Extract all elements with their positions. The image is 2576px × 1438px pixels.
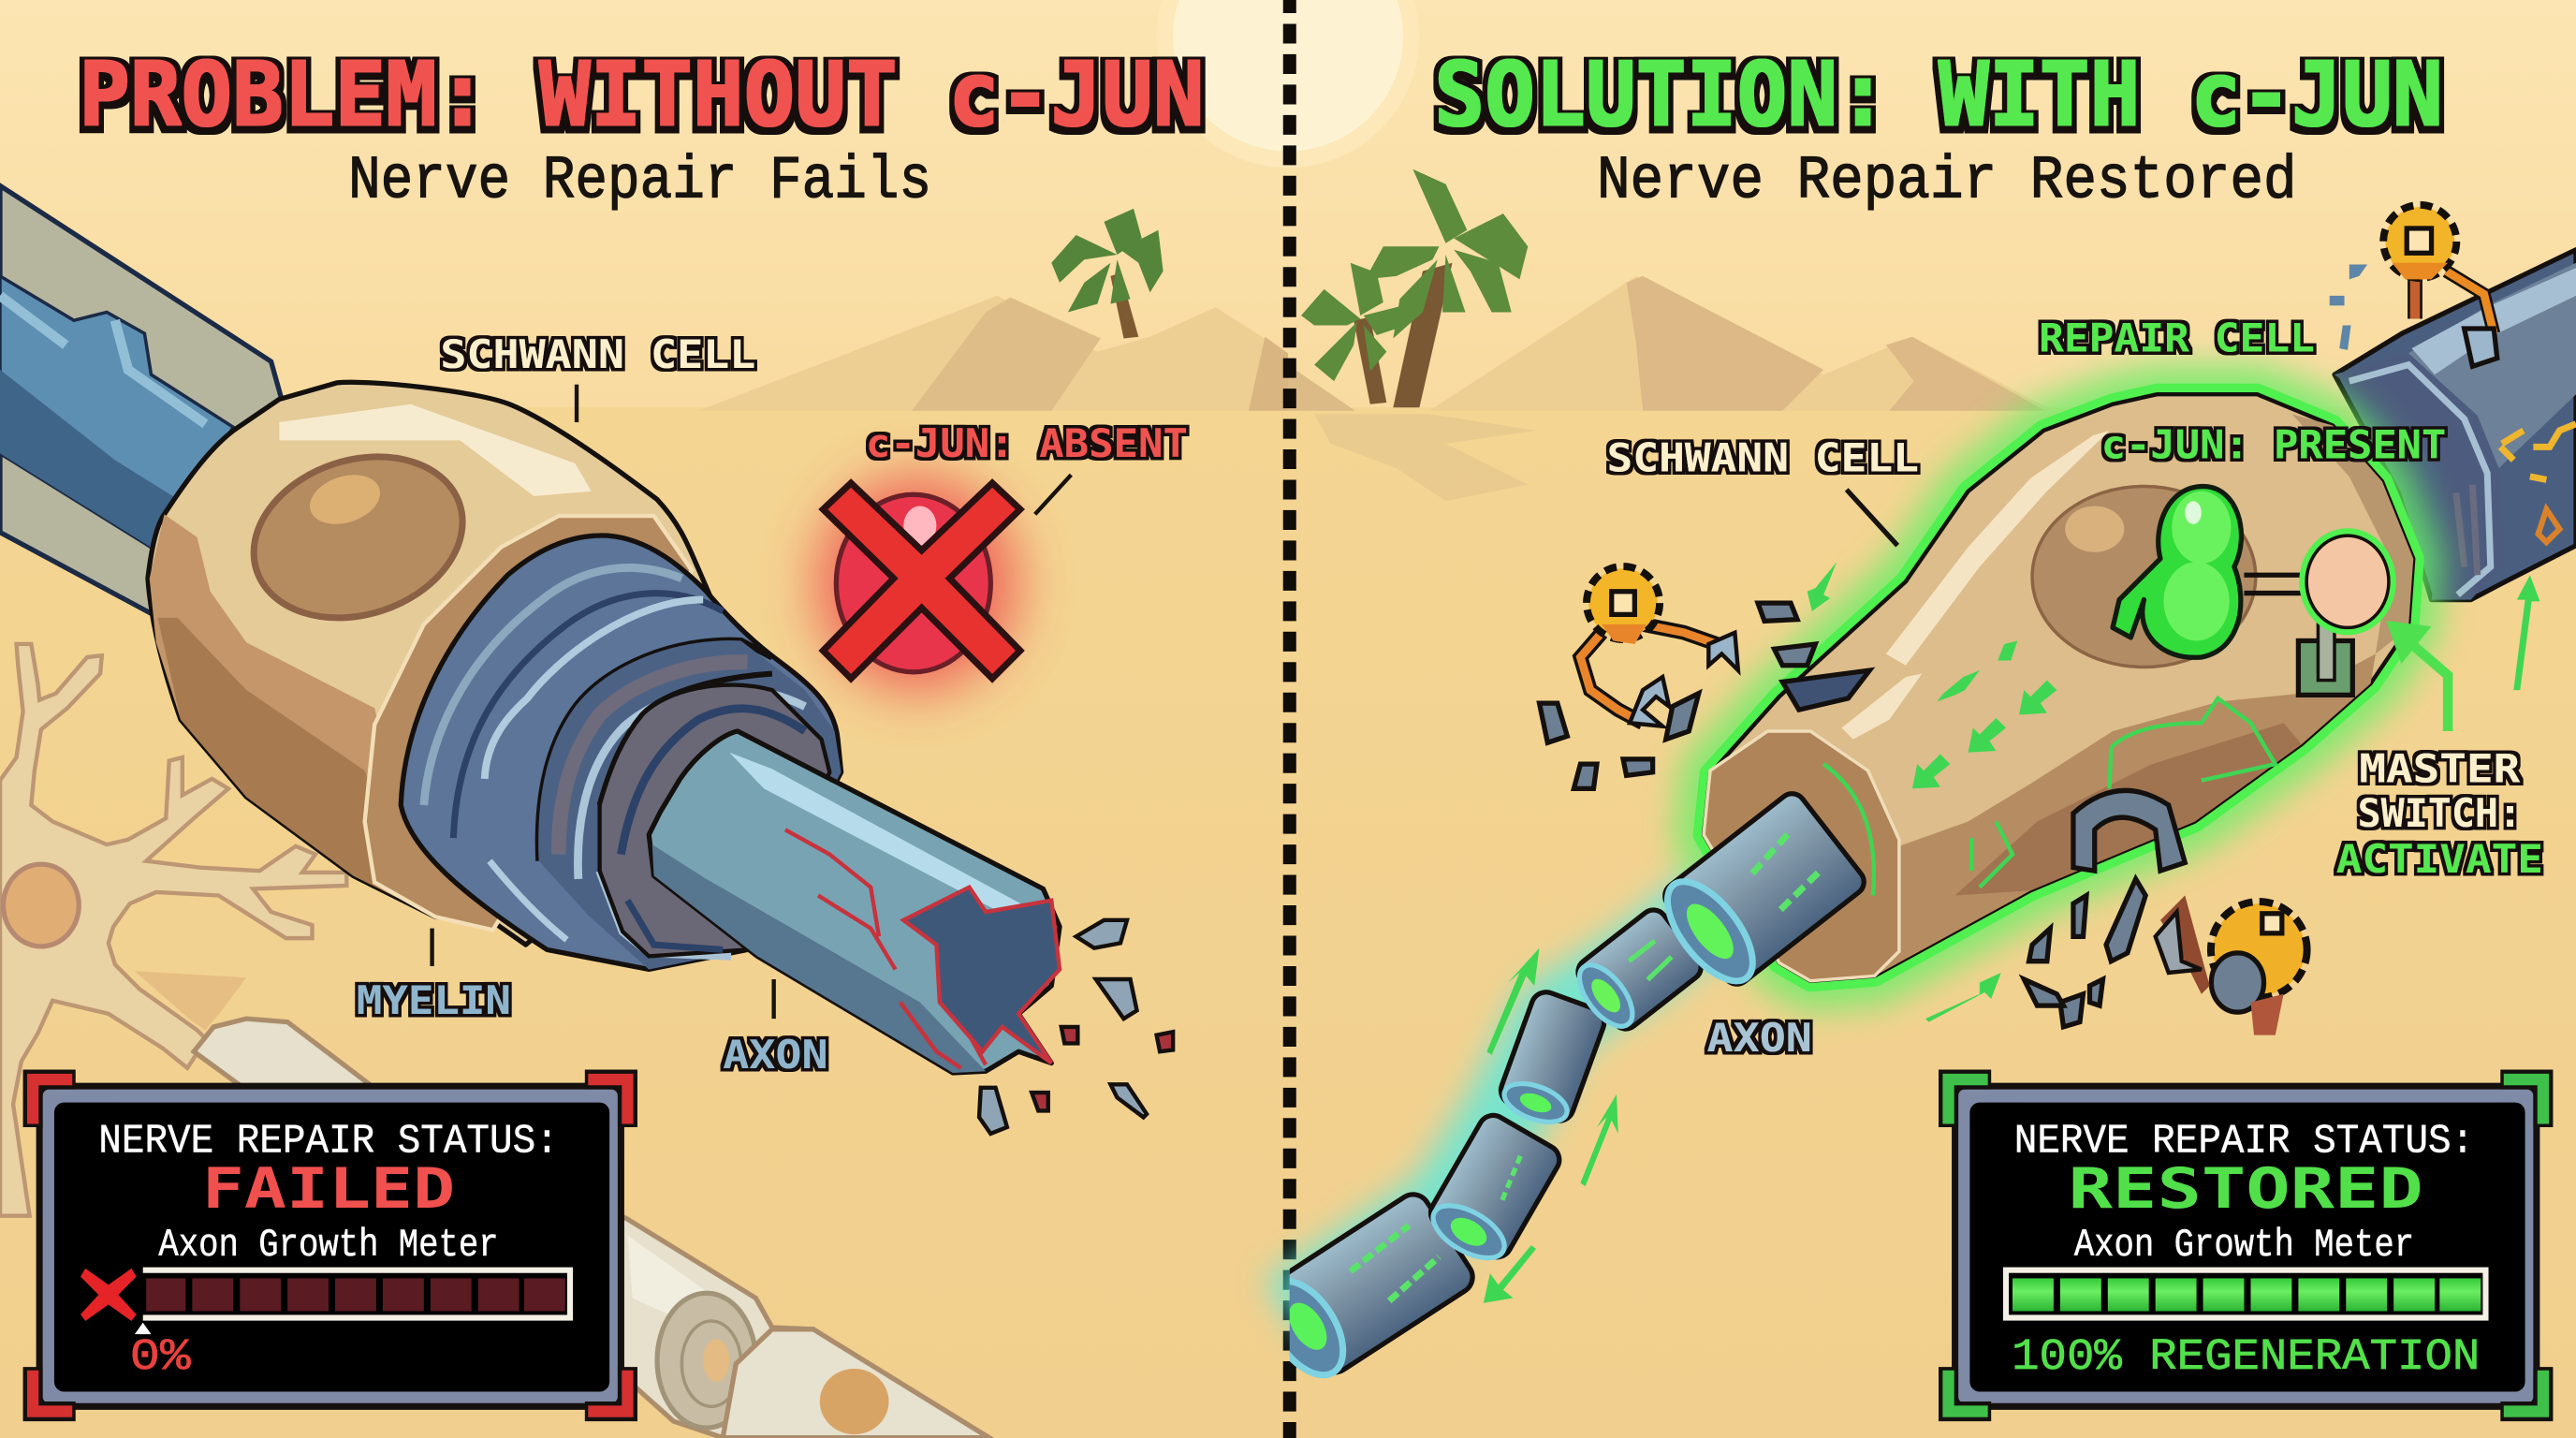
nucleus [2032,486,2256,668]
severed axon [649,731,1173,1134]
subtitle: solution: Nerve Repair Restored [1597,148,2297,216]
myelin rings [401,536,842,969]
label: Schwann cell right: SCHWANN CELL [1606,435,1919,481]
panel: restored status [1949,1079,2543,1412]
zero percent: 0% [130,1333,191,1383]
dark nerve upper right [2334,250,2576,600]
meter pointer [135,1323,151,1334]
corner brackets [1949,1079,2543,1412]
segment 5 [1290,1192,1475,1378]
Schwann cell body [148,382,772,945]
segment 1 [1662,791,1866,987]
status value: RESTORED [2069,1157,2423,1222]
corner brackets [33,1079,627,1412]
regeneration readout: 100% REGENERATION [2012,1333,2480,1383]
meter fail cross [80,1269,137,1321]
label: axon left: AXON [723,1032,828,1078]
cyan regrowth glow [1288,895,1725,1314]
status heading: NERVE REPAIR STATUS: [2014,1118,2474,1165]
label: myelin: MYELIN [357,977,511,1023]
c-Jun protein [2113,486,2241,657]
nucleus [233,431,484,644]
cell shading [1875,654,2376,976]
master switch lever [2244,533,2392,695]
palm tree: left [1051,209,1164,339]
label: master switch activate: SWITCH: [2358,790,2522,836]
leader line right [1847,490,1897,546]
label: master switch activate: ACTIVATE [2336,836,2543,882]
regrown axon segments [1250,788,1869,1391]
centre divider [1286,0,1294,1438]
segment 4 [1428,1112,1561,1260]
sun [1157,0,1419,168]
neuron silhouette: left background [0,644,346,1216]
green signal traces [1484,562,2539,1303]
empty growth meter [143,1270,570,1318]
label: master switch activate [2336,745,2543,882]
gear: lower repair unit [2156,895,2305,1035]
label: c-Jun absent: c-JUN: ABSENT [866,420,1188,466]
label: c-Jun present: c-JUN: PRESENT [2101,422,2446,468]
palm trees: right [1301,169,1528,407]
meter title: Axon Growth Meter [158,1223,499,1268]
status value: FAILED [202,1157,455,1222]
nerve sheath upper left [0,185,283,616]
segment 2 [1575,907,1704,1032]
dunes: right background [1288,276,2054,501]
panel: solution illustration [1250,207,2576,1391]
panel: failed status [33,1079,627,1412]
mouth rim [365,516,692,930]
green cell glow [1704,394,2413,981]
full growth meter [2006,1270,2485,1318]
gear: upper repair unit [2330,207,2497,366]
title: solution: SOLUTION: WITH c-JUN [1434,43,2443,146]
status heading: NERVE REPAIR STATUS: [98,1118,559,1165]
myelin debris left [1540,603,1869,788]
label: Schwann cell left: SCHWANN CELL [440,331,755,377]
dunes: left background [698,296,1288,411]
title: problem: PROBLEM: WITHOUT c-JUN [79,43,1204,146]
master switch arrow [2389,623,2448,731]
nerve tube: lower left background [194,1019,989,1438]
label: axon right: AXON [1707,1015,1812,1061]
myelin debris right [2024,879,2145,1027]
gear: left repair unit [1580,568,1738,726]
panel: problem illustration [0,185,1173,1134]
segment 3 [1498,990,1606,1124]
axon fragments [979,920,1173,1134]
c-Jun absent marker [815,475,1020,692]
myelin arc breaking off [2073,790,2185,871]
subtitle: problem: Nerve Repair Fails [348,148,931,216]
meter title: Axon Growth Meter [2074,1223,2414,1268]
label: repair cell: REPAIR CELL [2039,315,2315,361]
label: master switch activate: MASTER [2359,745,2521,791]
Schwann cell: repair state [1704,394,2413,981]
leader lines left [432,385,1071,1019]
